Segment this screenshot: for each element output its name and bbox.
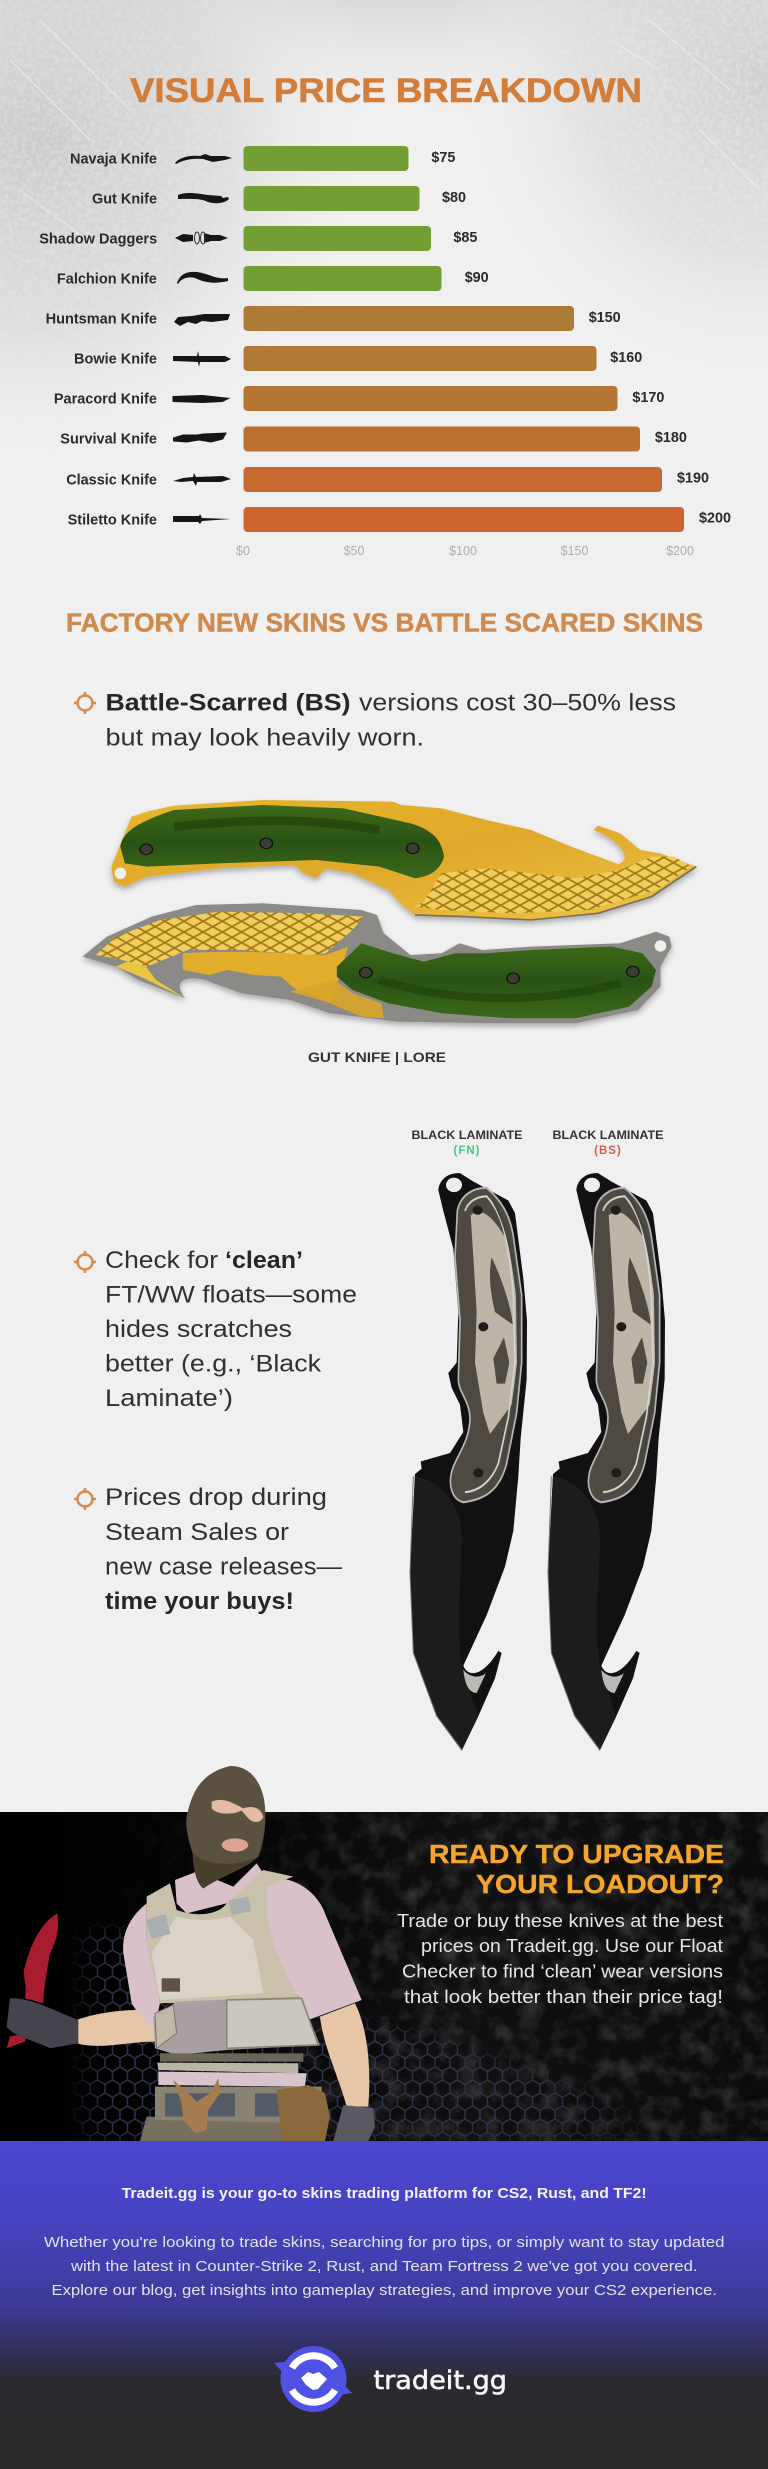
bullet: clean floats <box>74 1247 357 1412</box>
pants <box>140 2117 282 2141</box>
icon: target <box>74 1488 96 1510</box>
row: bowie knife <box>74 346 642 371</box>
row: navaja knife: Navaja Knife <box>70 150 157 167</box>
left arm <box>77 2010 155 2046</box>
waist <box>160 2053 303 2062</box>
row: classic knife: $190 <box>677 470 709 486</box>
row: paracord knife: Paracord Knife <box>54 390 157 407</box>
heading: ready to upgrade <box>429 1839 724 1899</box>
text: cta body: Checker to find ‘clean’ wear versions <box>402 1962 723 1982</box>
text: description: Explore our blog, get insights into gameplay strategies, and improve your CS2 experience. <box>52 2283 717 2299</box>
bullet: steam sales: Steam Sales or <box>105 1519 289 1546</box>
bullet: steam sales: new case releases— <box>105 1554 342 1580</box>
row: huntsman knife <box>46 306 621 331</box>
row: gut knife: Gut Knife <box>92 190 157 207</box>
text: tradeit.gg wordmark: tradeit.gg <box>374 2366 507 2396</box>
belt <box>155 2087 322 2123</box>
text: description: Whether you're looking to trade skins, searching for pro tips, or simply want to stay updated <box>44 2235 724 2251</box>
row: classic knife <box>66 467 709 492</box>
heading: ready to upgrade: READY TO UPGRADE <box>429 1839 724 1869</box>
axis labels <box>236 544 694 558</box>
bullet: clean floats: Laminate’) <box>105 1385 233 1412</box>
row: gut knife <box>92 186 466 211</box>
row: shadow daggers: Shadow Daggers <box>39 230 157 247</box>
row: huntsman knife: $150 <box>589 310 621 326</box>
right glove <box>333 2105 375 2141</box>
shirt <box>123 1863 362 2027</box>
row: falchion knife <box>57 266 489 291</box>
row: survival knife: Survival Knife <box>60 430 157 447</box>
row: huntsman knife: Huntsman Knife <box>46 310 157 327</box>
axis labels: $200 <box>666 544 694 558</box>
heading: factory new vs battle scarred: FACTORY NEW SKINS VS BATTLE SCARED SKINS <box>66 610 703 638</box>
text: cta body: Trade or buy these knives at the best <box>397 1911 723 1931</box>
title: visual price breakdown: VISUAL PRICE BREAKDOWN <box>130 72 642 110</box>
image: gut knife lore battle-scarred (bottom) <box>82 903 672 1023</box>
panel: footer <box>0 2141 768 2469</box>
row: bowie knife: $160 <box>610 350 642 366</box>
caption: black laminate fn <box>412 1130 523 1157</box>
row: classic knife: Classic Knife <box>66 471 157 488</box>
bullet: steam sales: Prices drop during <box>105 1484 327 1511</box>
image: black laminate knife bs <box>548 1173 665 1751</box>
caption: black laminate bs: (BS) <box>594 1145 622 1157</box>
row: bowie knife: Bowie Knife <box>74 350 157 367</box>
text: cta body: that look better than their price tag! <box>404 1987 723 2007</box>
bullet: clean floats: Check for <box>105 1247 218 1274</box>
bullet: steam sales <box>74 1484 342 1615</box>
icon: target <box>74 1251 96 1273</box>
row: gut knife: $80 <box>442 190 466 206</box>
vest upper <box>147 1870 300 2003</box>
heading: ready to upgrade: YOUR LOADOUT? <box>476 1869 724 1899</box>
eagle buckle <box>173 2078 220 2133</box>
bullet: steam sales: time your buys! <box>105 1588 294 1615</box>
row: shadow daggers: $85 <box>453 230 477 246</box>
bullet: clean floats: hides scratches <box>105 1316 292 1343</box>
image: black laminate knife fn <box>410 1173 527 1751</box>
bullet: battle-scarred <box>74 690 676 752</box>
left glove <box>7 1998 78 2048</box>
image: gut knife lore factory new (top) <box>111 800 696 920</box>
row: survival knife: $180 <box>655 430 687 446</box>
illustration: masked soldier with red knife <box>7 1766 375 2141</box>
text: cta body <box>397 1911 723 2007</box>
row: stiletto knife <box>68 507 731 532</box>
icon: tradeit logo <box>274 2346 352 2412</box>
row: falchion knife: $90 <box>465 270 489 286</box>
bullet: battle-scarred: versions cost 30–50% less <box>359 690 676 716</box>
panel: dark cta band <box>0 1812 768 2141</box>
row: shadow daggers <box>39 226 477 251</box>
bullet: battle-scarred: but may look heavily worn. <box>106 724 424 752</box>
caption: black laminate fn: BLACK LAMINATE <box>412 1130 523 1142</box>
red knife <box>7 1913 58 2048</box>
row: falchion knife: Falchion Knife <box>57 270 157 287</box>
right arm <box>320 2003 369 2107</box>
vest lower band <box>153 1997 320 2055</box>
row: survival knife <box>60 426 687 452</box>
axis labels: $50 <box>344 544 364 558</box>
text: cta body: prices on Tradeit.gg. Use our Float <box>421 1936 723 1956</box>
bullet: clean floats: better (e.g., ‘Black <box>105 1350 322 1378</box>
caption: black laminate bs: BLACK LAMINATE <box>552 1130 664 1142</box>
bullet: clean floats: FT/WW floats—some <box>105 1282 357 1308</box>
row: navaja knife <box>70 146 455 171</box>
icon: target <box>74 692 96 714</box>
text: tagline: Tradeit.gg is your go-to skins trading platform for CS2, Rust, and TF2! <box>122 2185 647 2202</box>
axis labels: $0 <box>236 544 250 558</box>
caption: black laminate fn: (FN) <box>454 1145 480 1157</box>
bar chart: knife prices <box>39 146 731 558</box>
caption: black laminate bs <box>552 1130 664 1157</box>
axis labels: $100 <box>449 544 477 558</box>
bullet: clean floats: ‘clean’ <box>225 1247 303 1274</box>
text: description <box>44 2235 724 2299</box>
bullet: battle-scarred: Battle-Scarred (BS) <box>106 690 350 716</box>
row: stiletto knife: $200 <box>699 510 731 526</box>
balaclava <box>186 1766 265 1888</box>
page background <box>0 0 768 384</box>
row: paracord knife: $170 <box>632 390 664 406</box>
axis labels: $150 <box>561 544 588 558</box>
row: navaja knife: $75 <box>431 150 455 166</box>
pouch <box>277 2085 330 2141</box>
row: paracord knife <box>54 386 664 411</box>
row: stiletto knife: Stiletto Knife <box>68 511 157 528</box>
caption: gut knife lore: GUT KNIFE | LORE <box>308 1049 446 1065</box>
text: description: with the latest in Counter-Strike 2, Rust, and Team Fortress 2 we've got you covered. <box>70 2259 698 2275</box>
